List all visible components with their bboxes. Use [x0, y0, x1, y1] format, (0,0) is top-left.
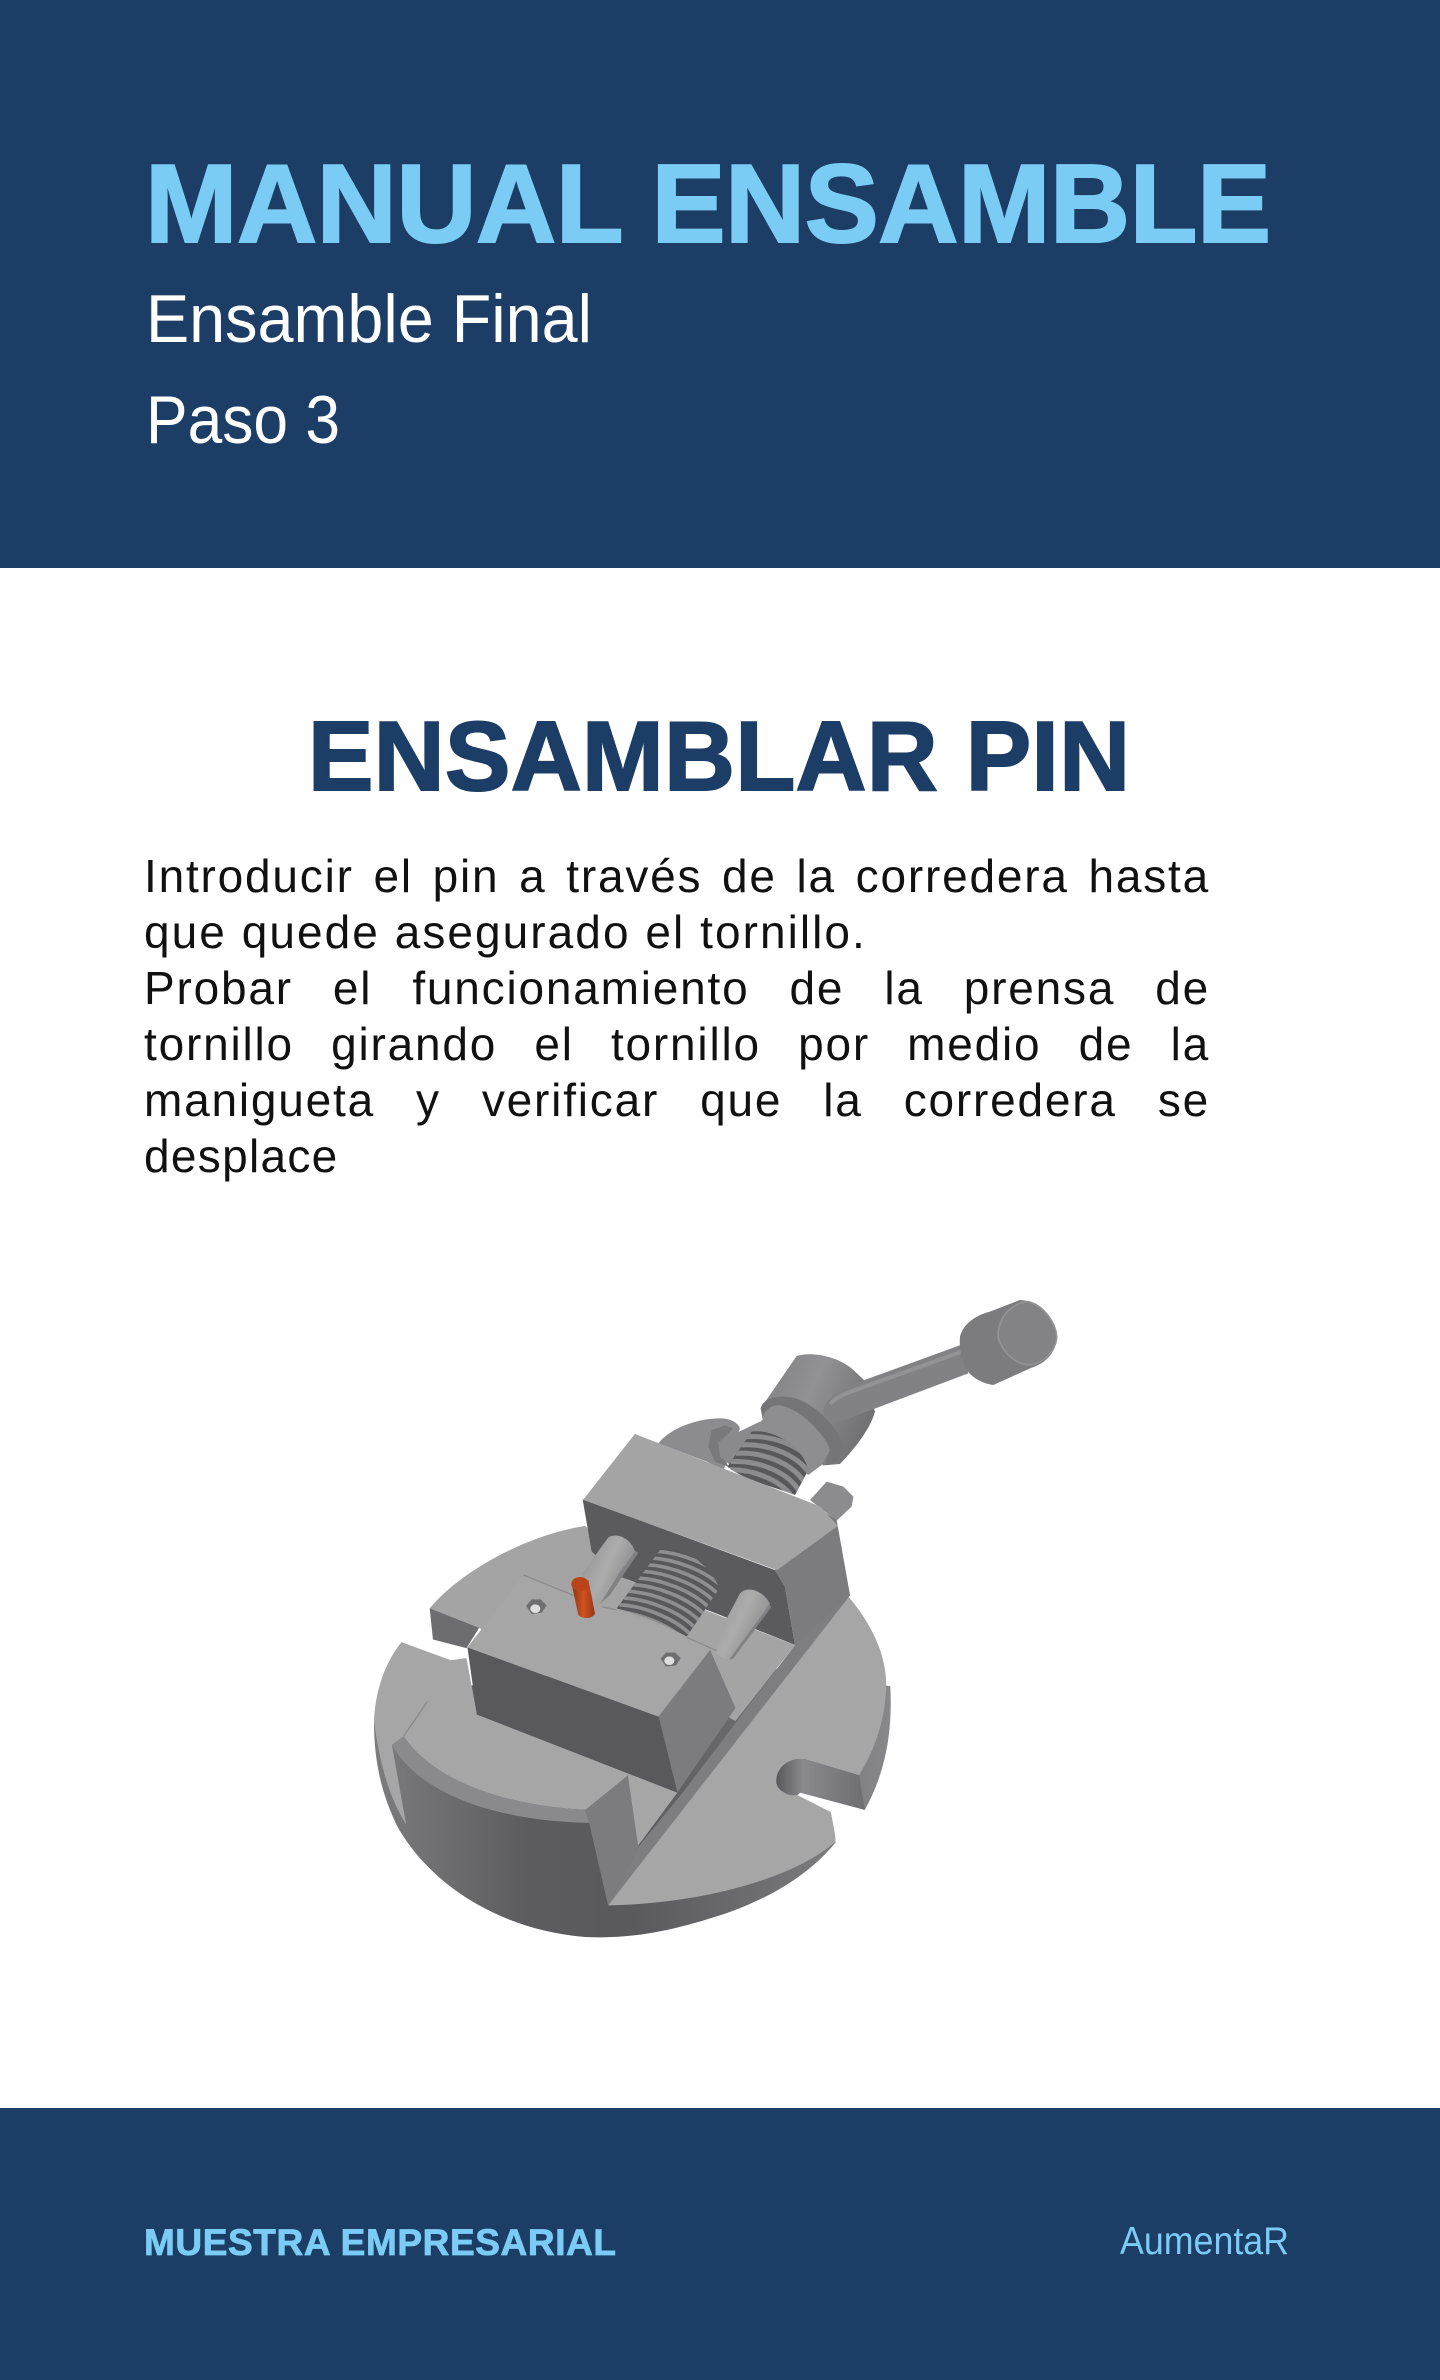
back pin [810, 1482, 853, 1521]
lever highlight [830, 1352, 962, 1404]
block top edge line [523, 1575, 717, 1651]
hub body [761, 1354, 875, 1465]
body text [144, 850, 1210, 1182]
body text: tornillo girando el tornillo por medio de la [144, 1018, 1210, 1070]
subtitle: step number: Paso 3 [146, 382, 340, 458]
left guide rod [582, 1536, 635, 1603]
front block top [467, 1575, 710, 1717]
disc side [374, 1660, 891, 1937]
pin and set screws [523, 1575, 717, 1667]
back block top [583, 1434, 838, 1570]
vise illustration [374, 1300, 1057, 1937]
back block side [775, 1510, 850, 1645]
rail side face [585, 1775, 638, 1905]
body text: Introducir el pin a través de la corredera hasta [144, 850, 1210, 902]
heading: ENSAMBLAR PIN [308, 701, 1130, 811]
body text: que quede asegurado el tornillo. [144, 906, 867, 958]
body text: Probar el funcionamiento de la prensa de [144, 962, 1210, 1014]
body text: manigueta y verificar que la corredera se [144, 1074, 1210, 1126]
set screw hole left [526, 1599, 547, 1614]
back nub [658, 1418, 740, 1470]
right guide rod shadow [727, 1603, 772, 1661]
rim edge [392, 1736, 589, 1823]
guide stub [718, 1422, 764, 1465]
title: MANUAL ENSAMBLE [145, 142, 1271, 266]
vise base [374, 1526, 891, 1937]
subtitle: ensamble final: Ensamble Final [146, 281, 592, 357]
nub detail [708, 1425, 733, 1467]
step edge line [404, 1702, 427, 1736]
disc top right [608, 1595, 886, 1905]
red pin [571, 1577, 595, 1618]
front block front [467, 1647, 677, 1793]
knob [960, 1300, 1057, 1385]
guide bed [590, 1565, 795, 1721]
slot wall [776, 1759, 865, 1810]
handle and back screw [658, 1300, 1057, 1521]
center screw [616, 1550, 718, 1636]
neck [753, 1405, 830, 1475]
ring [761, 1397, 843, 1465]
guide section [582, 1499, 850, 1661]
left guide rod shadow [600, 1550, 638, 1604]
body text: desplace [144, 1130, 339, 1182]
back tab side [430, 1608, 479, 1648]
disc top back [430, 1526, 642, 1660]
footer right label: AumentaR [1120, 2220, 1289, 2263]
footer left label: MUESTRA EMPRESARIAL [144, 2222, 616, 2263]
rail diagonal strip [608, 1584, 850, 1905]
right guide rod [710, 1589, 770, 1661]
set screw hole right [661, 1653, 681, 1667]
back block front [583, 1499, 795, 1645]
front block side [659, 1650, 735, 1793]
lever [823, 1345, 968, 1421]
back and front blocks [467, 1434, 838, 1793]
disc top left [374, 1642, 677, 1847]
back thread [727, 1431, 808, 1495]
header band [0, 0, 1440, 568]
footer band [0, 2108, 1440, 2380]
